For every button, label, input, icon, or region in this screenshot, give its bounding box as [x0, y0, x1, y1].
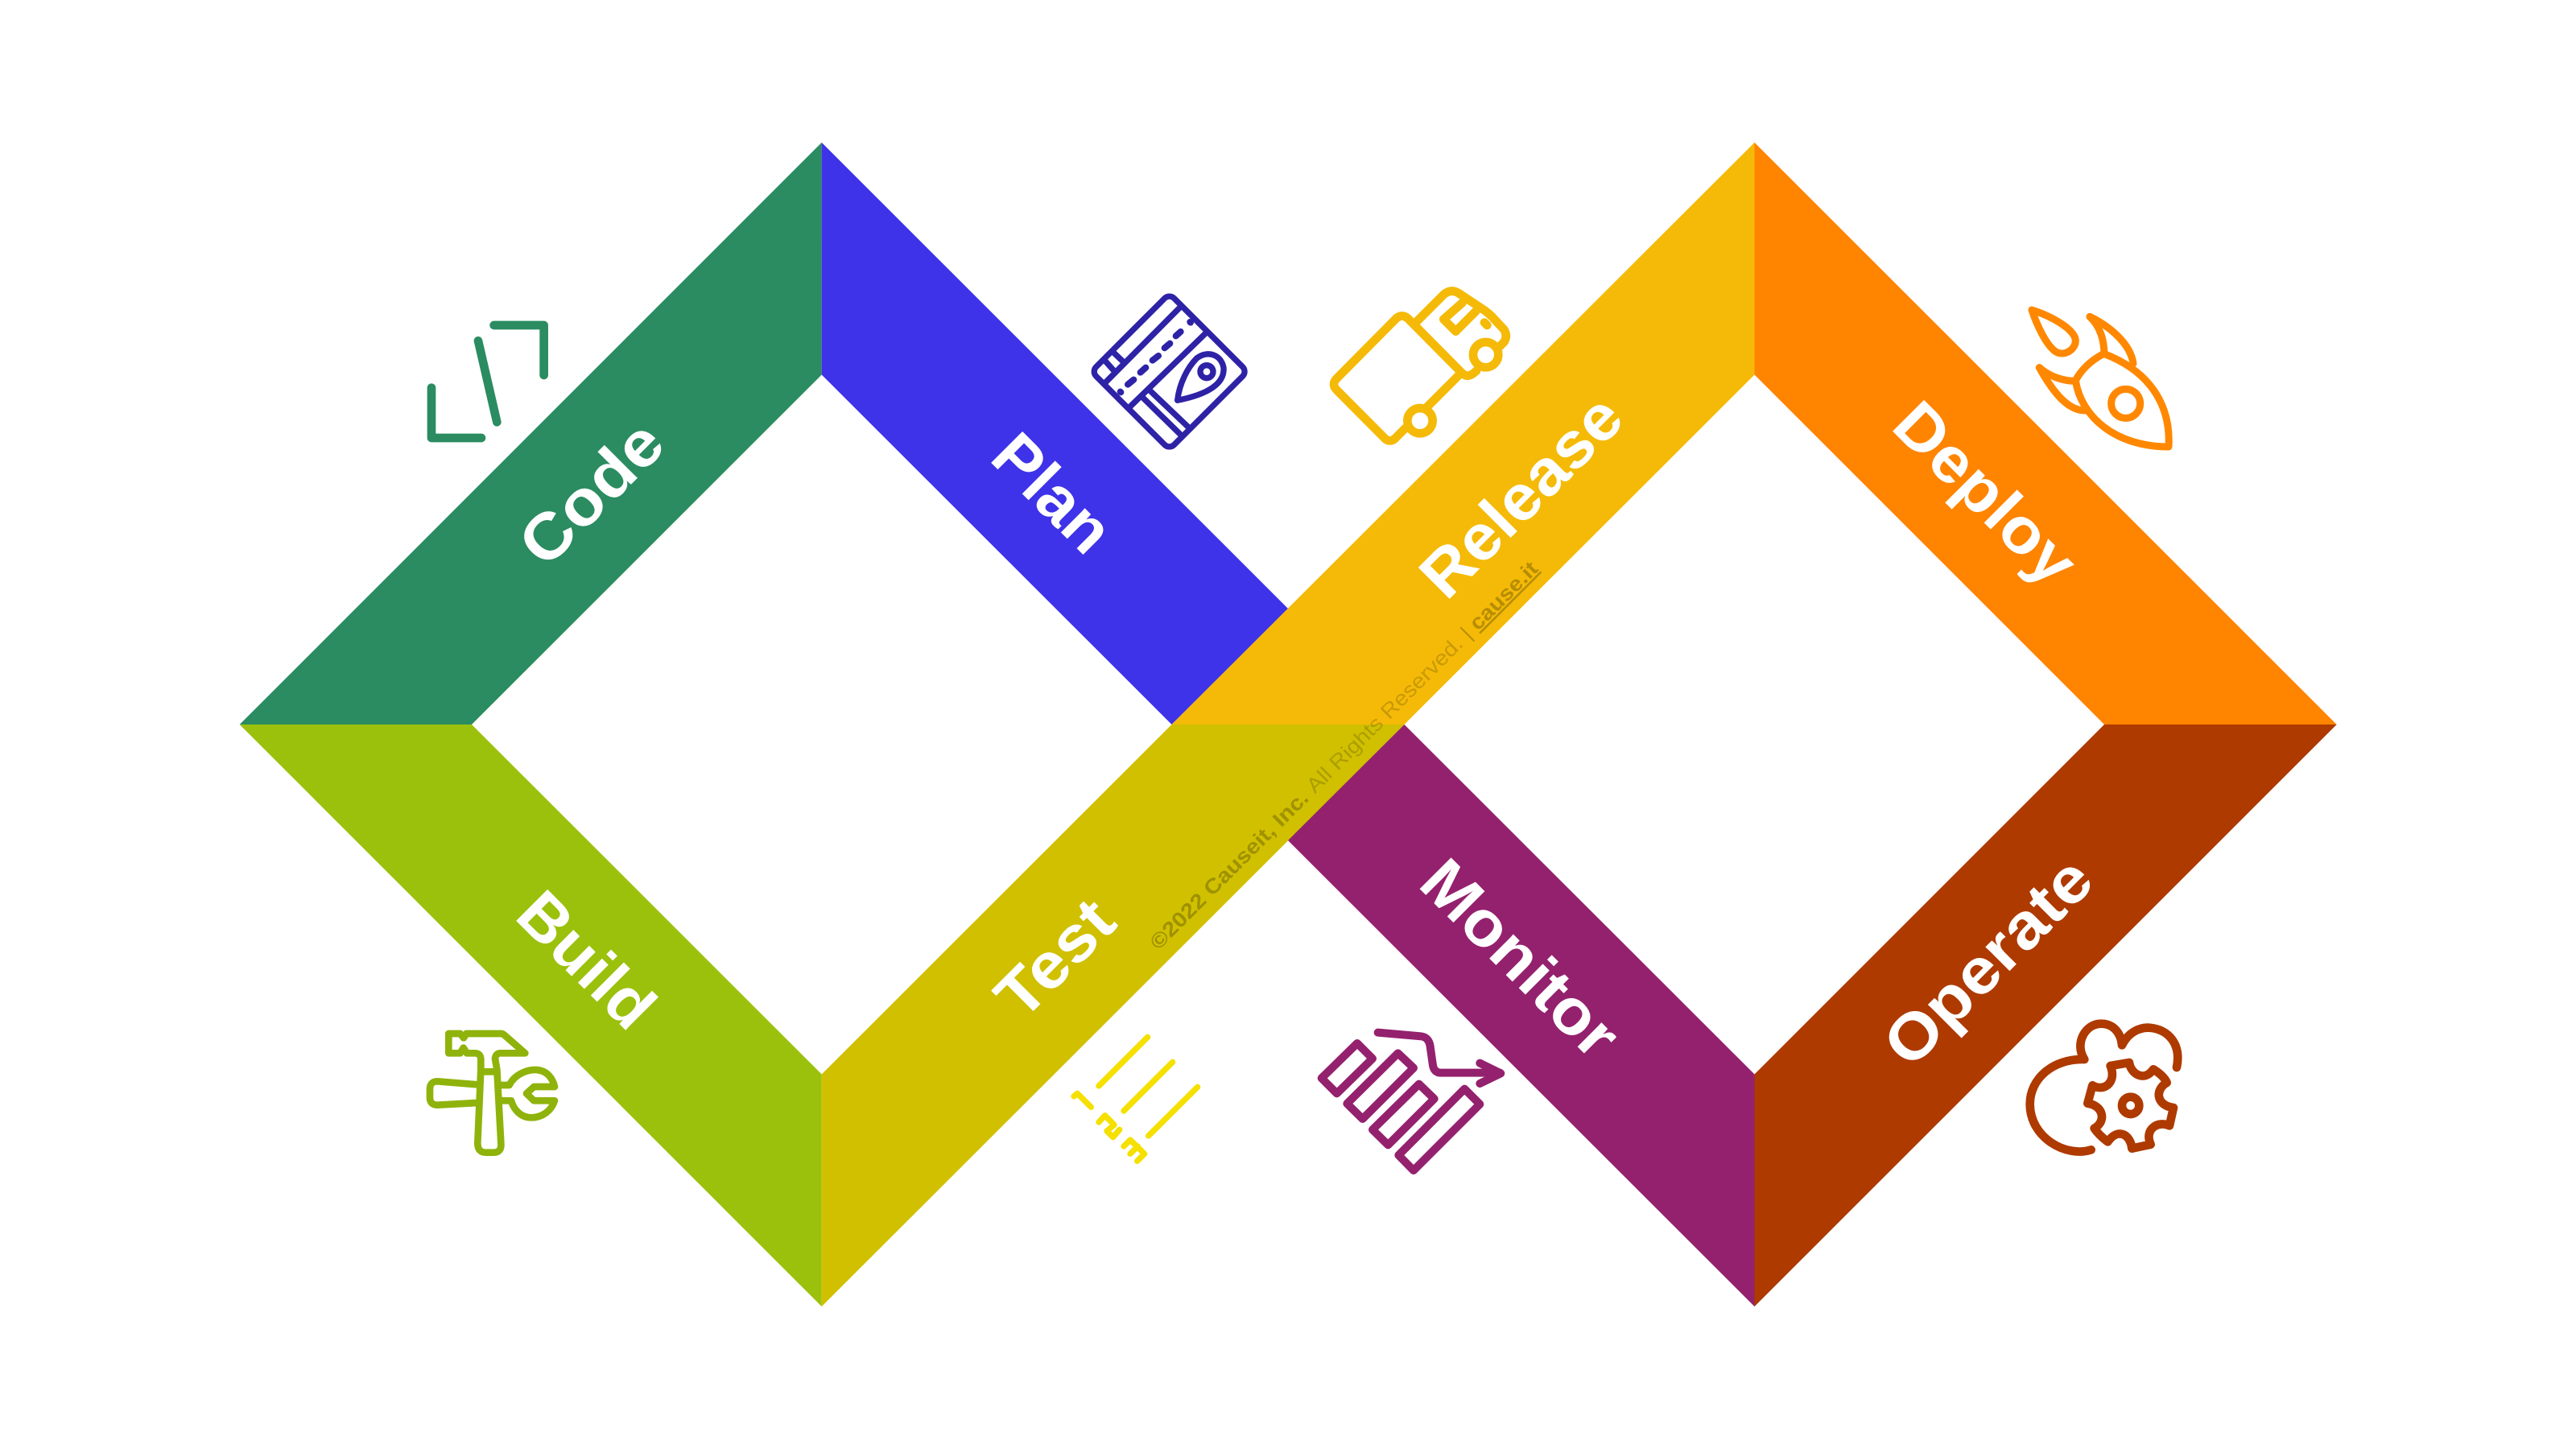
icon: road map with pin: [1092, 294, 1248, 449]
panel: Build: [240, 724, 822, 1307]
panel: Monitor: [1288, 724, 1755, 1307]
panel: Plan: [822, 142, 1288, 724]
icon: hammer and wrench: [430, 1034, 555, 1153]
panel: Code: [240, 142, 822, 724]
icon: bar chart with arrow: [1322, 1033, 1501, 1170]
copyright watermark: ©2022 Causeit, Inc.: [1145, 786, 1313, 954]
copyright watermark: cause.it: [1464, 556, 1543, 635]
label: Plan: Plan: [978, 419, 1127, 568]
copyright watermark: All Rights Reserved.: [1302, 631, 1468, 798]
icon: cloud with gear: [2030, 1024, 2178, 1152]
icon: code brackets: [431, 325, 544, 438]
label: Monitor: Monitor: [1407, 844, 1634, 1071]
panel: Test: [822, 724, 1404, 1307]
copyright watermark: [1145, 556, 1543, 954]
label: Test: Test: [980, 884, 1129, 1032]
label: Release: Release: [1406, 381, 1637, 612]
icon: delivery truck: [1334, 291, 1506, 440]
label: Build: Build: [503, 877, 670, 1043]
label: Code: Code: [505, 407, 678, 580]
icon: numbered checklist: [1074, 1037, 1198, 1161]
label: Deploy: Deploy: [1880, 387, 2092, 599]
copyright watermark: |: [1455, 622, 1476, 643]
panel: Release: [1172, 142, 1755, 724]
label: Operate: Operate: [1869, 843, 2107, 1080]
panel: Operate: [1755, 724, 2337, 1307]
panel: Deploy: [1755, 142, 2337, 724]
icon: rocket: [2032, 310, 2169, 447]
